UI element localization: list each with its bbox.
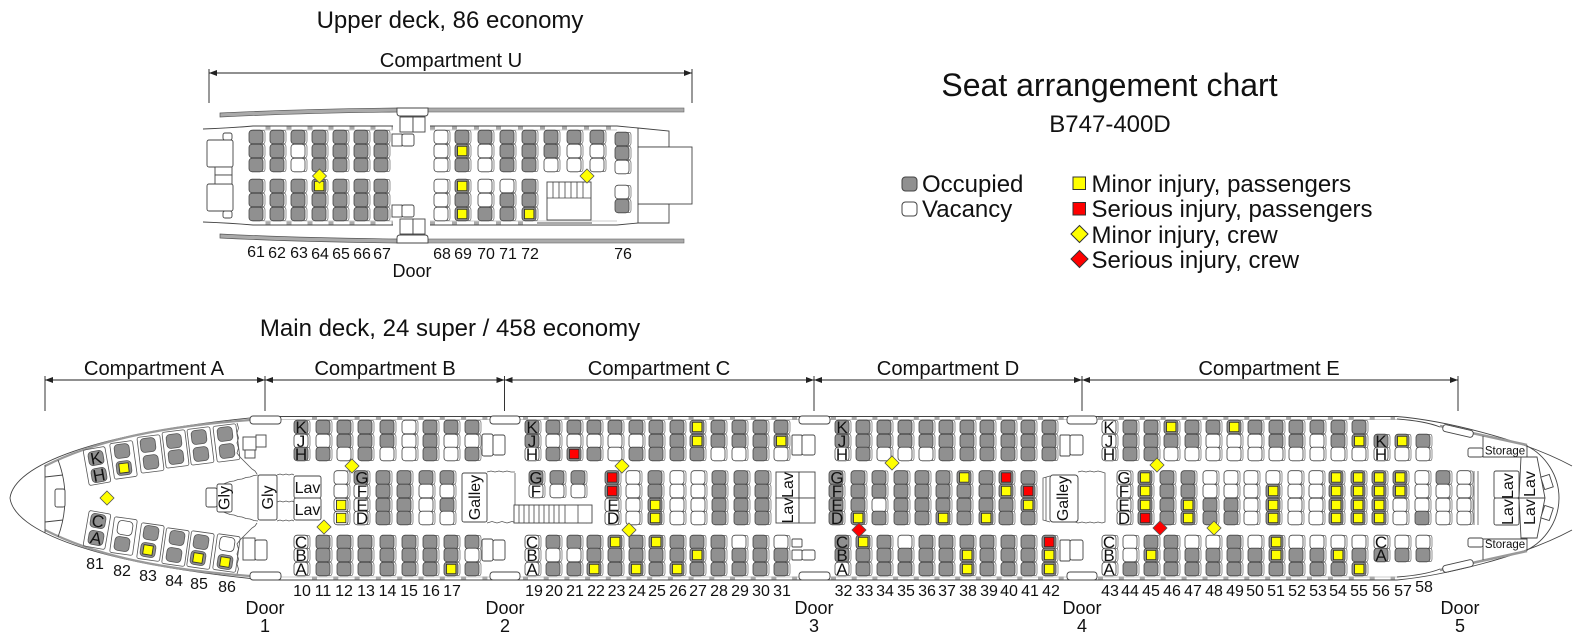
main deck row numbers: 10: [293, 583, 311, 600]
crew injury marker: compartment E serious: [1153, 521, 1167, 535]
compartment E seats: J: [1105, 432, 1113, 451]
compartment E seats: B: [1103, 546, 1115, 565]
upper deck row numbers: 63: [290, 245, 308, 262]
main deck row numbers: 41: [1021, 583, 1039, 600]
main deck row numbers: 21: [566, 583, 584, 600]
compartment E seats: C: [1375, 533, 1387, 552]
crew injury marker: compartment C lower: [622, 523, 636, 537]
label: Lav lower: Lav: [295, 502, 320, 519]
upper deck row numbers: 61: [247, 244, 265, 261]
compartment C bracket: Compartment C: [588, 358, 730, 380]
compartment D bracket: Compartment D: [877, 358, 1019, 380]
main deck doors: [250, 416, 1474, 580]
compartment A row numbers: [86, 556, 236, 596]
door labels: [245, 598, 1480, 636]
legend: serious injury crew: Serious injury, crew: [1092, 247, 1300, 274]
upper deck row numbers: 64: [311, 246, 329, 263]
compartment B seats: E: [356, 496, 368, 515]
compartment B seats: G: [355, 468, 369, 488]
compartment E seats: C: [1103, 533, 1115, 552]
compartment E seats: H: [1375, 445, 1387, 464]
label: Lav upper: Lav: [295, 480, 320, 497]
compartment A seats: H: [91, 465, 107, 486]
upper deck row numbers: 76: [614, 246, 632, 263]
door labels: 2: [500, 616, 510, 636]
crew injury marker: compartment B upper: [345, 459, 359, 473]
compartment A row numbers: 85: [190, 576, 208, 593]
chart subtitle: B747-400D: [1049, 111, 1171, 138]
upper deck row numbers: [247, 244, 632, 263]
compartment B bracket: Compartment B: [314, 358, 456, 380]
compartment B seats: B: [295, 546, 307, 565]
main deck row numbers: [293, 579, 1433, 600]
main deck row numbers: 54: [1329, 583, 1347, 600]
legend: vacancy: Vacancy: [922, 196, 1012, 223]
main deck row numbers: 27: [689, 583, 707, 600]
door labels: Door: [485, 598, 525, 618]
compartment B seats: H: [295, 445, 307, 464]
label: Storage upper: Storage: [1485, 446, 1525, 458]
upper deck row numbers: 72: [521, 246, 539, 263]
chart title: Seat arrangement chart: [941, 67, 1278, 103]
aft lavatories and storage: [1468, 436, 1553, 560]
compartment A row numbers: 84: [165, 573, 183, 590]
main deck row numbers: 22: [587, 583, 605, 600]
upper deck row numbers: 65: [332, 246, 350, 263]
crew injury marker: compartment E lower: [1207, 521, 1221, 535]
compartment E seats: A: [1103, 560, 1115, 579]
door labels: 1: [260, 616, 270, 636]
compartment E seats: K: [1103, 418, 1115, 437]
door labels: Door: [1062, 598, 1102, 618]
compartment A bracket: Compartment A: [84, 358, 225, 380]
crew injury marker: upper deck left: [312, 169, 326, 183]
stairs in compartment C: [514, 505, 592, 523]
compartment D seats: [829, 418, 1058, 579]
compartment C seats: H: [526, 445, 538, 464]
main deck row numbers: 17: [443, 583, 461, 600]
legend: occupied: Occupied: [922, 171, 1023, 198]
compartment B seats: C: [295, 533, 307, 552]
label: Gly rear: [258, 475, 277, 520]
main deck row numbers: 25: [648, 583, 666, 600]
main deck row numbers: 52: [1288, 583, 1306, 600]
label: Galley: Galley: [467, 475, 484, 520]
compartment C seats: B: [526, 546, 538, 565]
compartment B seats: J: [297, 432, 305, 451]
main deck row numbers: 47: [1184, 583, 1202, 600]
legend: minor injury crew: Minor injury, crew: [1092, 222, 1278, 249]
main deck row numbers: 12: [335, 583, 353, 600]
compartment D seats: C: [836, 533, 848, 552]
galley at door 4: Galley: [1055, 476, 1072, 521]
upper deck cabin structure: [203, 108, 692, 243]
compartment A row numbers: 82: [113, 563, 131, 580]
compartment D seats: G: [830, 468, 844, 488]
main deck row numbers: 11: [315, 583, 331, 600]
door labels: Door: [1440, 598, 1480, 618]
legend: minor injury passengers: Minor injury, passengers: [1092, 171, 1351, 198]
upper deck row numbers: 71: [499, 246, 517, 263]
main deck row numbers: 55: [1350, 583, 1368, 600]
compartment C seats: F: [531, 482, 541, 501]
compartment C seats: E: [607, 496, 619, 515]
compartment E seats: K: [1375, 432, 1387, 451]
compartment C seats: C: [526, 533, 538, 552]
main deck row numbers: 38: [959, 583, 977, 600]
compartment E seats: H: [1103, 445, 1115, 464]
main deck row numbers: 24: [628, 583, 646, 600]
compartment brackets: [45, 358, 1458, 411]
compartment U bracket: [209, 50, 692, 103]
crew injury marker: compartment C upper: [615, 459, 629, 473]
upper deck seats: [249, 130, 631, 221]
compartment B seats: K: [295, 418, 307, 437]
compartment D seats: B: [836, 546, 848, 565]
upper deck row numbers: 66: [353, 246, 371, 263]
cockpit nose: [45, 460, 65, 537]
compartment E seats: G: [1117, 468, 1131, 488]
compartment A row numbers: 83: [139, 568, 157, 585]
main deck row numbers: 39: [980, 583, 998, 600]
forward galley partitions: [206, 423, 294, 574]
compartment B seats: F: [357, 482, 367, 501]
main deck row numbers: 50: [1246, 583, 1264, 600]
compartment D seats: H: [836, 445, 848, 464]
door labels: 5: [1455, 616, 1465, 636]
main deck row numbers: 14: [379, 583, 396, 600]
compartment D seats: A: [836, 560, 848, 579]
compartment B seats: [294, 418, 481, 579]
main deck row numbers: 35: [897, 583, 915, 600]
lavatories at door 3: [776, 435, 815, 560]
main deck row numbers: 51: [1267, 583, 1285, 600]
lavatories and galley: compartment B: [294, 434, 587, 561]
upper deck row numbers: 67: [373, 246, 391, 263]
main deck row numbers: 58: [1415, 579, 1433, 596]
label: Lav forward lower: Lav: [1500, 499, 1517, 525]
compartment B seats: A: [295, 560, 307, 579]
label: Galley: [462, 473, 487, 522]
main deck row numbers: 49: [1226, 583, 1244, 600]
compartment E seats: F: [1119, 482, 1129, 501]
main deck row numbers: 29: [731, 583, 749, 600]
galley at door 4: [1043, 435, 1105, 561]
compartment D seats: E: [831, 496, 843, 515]
label: Lav aft lower: Lav: [1522, 499, 1539, 525]
main deck row numbers: 23: [608, 583, 626, 600]
main deck row numbers: 31: [773, 583, 791, 600]
main deck row numbers: 37: [938, 583, 956, 600]
label: Lav lower: Lav: [780, 498, 797, 523]
label: Gly front: [206, 484, 234, 512]
compartment A seats: C: [90, 511, 106, 532]
upper deck row numbers: 68: [433, 246, 451, 263]
compartment C seats: J: [528, 432, 536, 451]
main deck row numbers: 19: [525, 583, 543, 600]
compartment D seats: F: [832, 482, 842, 501]
compartment D seats: K: [836, 418, 848, 437]
main deck row numbers: 16: [422, 583, 440, 600]
door labels: 3: [809, 616, 819, 636]
compartment D seats: J: [838, 432, 846, 451]
legend: [902, 171, 1373, 274]
main deck row numbers: 45: [1142, 583, 1160, 600]
main deck row numbers: 46: [1163, 583, 1181, 600]
label: Gly front: Gly: [216, 486, 234, 510]
compartment A seats: K: [89, 448, 104, 469]
compartment C seats: D: [607, 509, 619, 528]
label: Lav upper: Lav: [780, 472, 797, 498]
upper deck row numbers: 70: [477, 246, 495, 263]
compartment C seats: A: [526, 560, 538, 579]
label: Lav aft upper: Lav: [1522, 471, 1539, 497]
crew injury marker: upper deck right: [580, 169, 594, 183]
main deck row numbers: 53: [1309, 583, 1327, 600]
main deck fuselage outline: [10, 416, 1572, 580]
crew injury marker: compartment A: [100, 491, 114, 505]
crew injury marker: compartment B lower: [317, 520, 331, 534]
compartment D seats: D: [831, 509, 843, 528]
door labels: Door: [245, 598, 285, 618]
main deck row numbers: 13: [357, 583, 375, 600]
compartment E seats: [1102, 418, 1473, 579]
main deck row numbers: 56: [1372, 583, 1390, 600]
compartment B seats: D: [356, 509, 368, 528]
crew injury marker: compartment D serious: [852, 523, 866, 537]
main deck row numbers: 44: [1121, 583, 1139, 600]
main deck row numbers: 34: [876, 583, 894, 600]
compartment E bracket: Compartment E: [1198, 358, 1340, 380]
door labels: 4: [1077, 616, 1087, 636]
main deck row numbers: 57: [1394, 583, 1412, 600]
label: Lav forward upper: Lav: [1500, 473, 1517, 499]
upper deck row numbers: 62: [268, 245, 286, 262]
crew injury marker: compartment D minor: [885, 456, 899, 470]
compartment E seats: E: [1118, 496, 1130, 515]
main deck row numbers: 33: [856, 583, 874, 600]
heading: upper deck: Upper deck, 86 economy: [317, 7, 583, 34]
compartment A row numbers: 86: [218, 579, 236, 596]
main deck row numbers: 26: [669, 583, 687, 600]
main deck row numbers: 20: [545, 583, 563, 600]
compartment U bracket: Compartment U: [380, 50, 522, 72]
legend: serious injury passengers: Serious injury, passengers: [1092, 196, 1373, 223]
main deck row numbers: 42: [1042, 583, 1060, 600]
main deck row numbers: 28: [710, 583, 728, 600]
label: Gly rear: Gly: [260, 486, 277, 510]
compartment E seats: A: [1375, 546, 1387, 565]
door labels: Door: [794, 598, 834, 618]
main deck row numbers: 15: [400, 583, 418, 600]
compartment C seats: K: [526, 418, 538, 437]
compartment C seats: [525, 418, 790, 579]
compartment A row numbers: 81: [86, 556, 104, 573]
compartment C seats: G: [529, 468, 543, 488]
main deck row numbers: 43: [1101, 583, 1119, 600]
main deck row numbers: 48: [1205, 583, 1223, 600]
compartment A seats: A: [89, 528, 104, 549]
upper deck door label: Door: [392, 261, 432, 281]
label: Storage lower: Storage: [1485, 539, 1525, 551]
crew injury marker: compartment E upper: [1150, 458, 1164, 472]
main deck row numbers: 30: [752, 583, 770, 600]
compartment A seats: [83, 424, 240, 572]
main deck row numbers: 40: [1000, 583, 1018, 600]
compartment E seats: D: [1118, 509, 1130, 528]
upper deck row numbers: 69: [454, 246, 472, 263]
main deck row numbers: 36: [918, 583, 936, 600]
heading: main deck: Main deck, 24 super / 458 economy: [260, 315, 640, 342]
main deck row numbers: 32: [835, 583, 852, 600]
